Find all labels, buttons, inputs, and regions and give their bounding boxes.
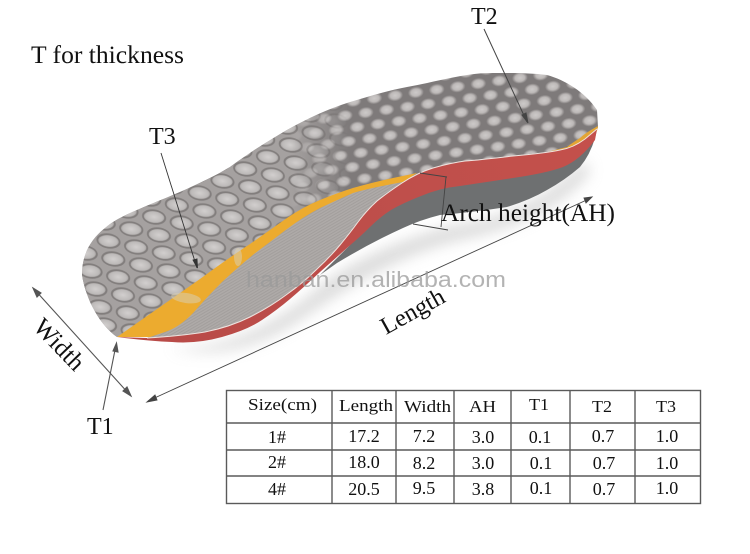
yellow top layer xyxy=(117,173,417,337)
table header row: T3 xyxy=(656,397,676,416)
table row 1#: 17.2 xyxy=(348,426,380,446)
white edge line xyxy=(147,129,597,338)
grey woven arch area xyxy=(147,173,417,338)
arrow: length dimension xyxy=(147,197,592,402)
dark grey heel sole xyxy=(320,130,597,275)
label: T1: T1 xyxy=(87,414,114,440)
table row 1#: 1.0 xyxy=(656,426,678,446)
table row 4#: 0.7 xyxy=(593,479,615,499)
title: T for thickness: T for thickness xyxy=(31,42,184,69)
watermark: hanban.en.alibaba.com xyxy=(246,267,506,292)
label: T3: T3 xyxy=(149,124,176,150)
label: length: Length xyxy=(376,283,450,340)
table row 2#: 0.1 xyxy=(530,453,552,473)
table header row xyxy=(248,395,676,416)
table header row: T1 xyxy=(529,395,549,414)
red foam layer xyxy=(117,129,597,342)
soft ground shadow xyxy=(170,160,590,352)
size table xyxy=(226,390,701,504)
table row 1#: 0.1 xyxy=(529,427,551,447)
table row 2# xyxy=(268,452,678,473)
table header row: AH xyxy=(469,397,496,416)
top surface with ring pattern on the forefoot and dots on the heel xyxy=(82,73,598,337)
table row 1#: 1# xyxy=(268,427,286,447)
arrow: T3 leader xyxy=(161,153,198,268)
table row 4#: 1.0 xyxy=(656,478,678,498)
label: width: Width xyxy=(28,313,90,377)
arrow: T2 leader xyxy=(484,29,528,123)
table row 2#: 18.0 xyxy=(348,452,380,472)
table row 1#: 3.0 xyxy=(472,427,494,447)
label: T2: T2 xyxy=(471,4,498,30)
table row 4#: 9.5 xyxy=(413,478,435,498)
table header row: Size(cm) xyxy=(248,395,317,414)
table row 4# xyxy=(268,478,678,499)
table row 4#: 4# xyxy=(268,479,286,499)
table header row: Length xyxy=(339,396,394,415)
yellow heel strip xyxy=(547,126,598,152)
table row 1# xyxy=(268,426,678,447)
table row 2#: 3.0 xyxy=(472,453,494,473)
table row 2#: 8.2 xyxy=(413,453,435,473)
table row 2#: 2# xyxy=(268,452,286,472)
yellow gloss patch xyxy=(234,248,242,266)
yellow gloss patch xyxy=(170,291,202,305)
table row 4#: 3.8 xyxy=(472,479,494,499)
table row 4#: 0.1 xyxy=(530,478,552,498)
table row 4#: 20.5 xyxy=(348,479,380,499)
table header row: T2 xyxy=(592,397,612,416)
insole product illustration xyxy=(82,73,598,352)
label: arch height: Arch height(AH) xyxy=(441,200,615,227)
table grid xyxy=(226,390,701,504)
arrow: T1 leader xyxy=(103,343,118,410)
table row 1#: 0.7 xyxy=(592,426,614,446)
arrow: width dimension xyxy=(33,288,131,396)
table row 2#: 1.0 xyxy=(656,453,678,473)
table header row: Width xyxy=(404,397,452,416)
table row 1#: 7.2 xyxy=(413,426,435,446)
table row 2#: 0.7 xyxy=(593,453,615,473)
arch height bracket xyxy=(413,173,448,230)
